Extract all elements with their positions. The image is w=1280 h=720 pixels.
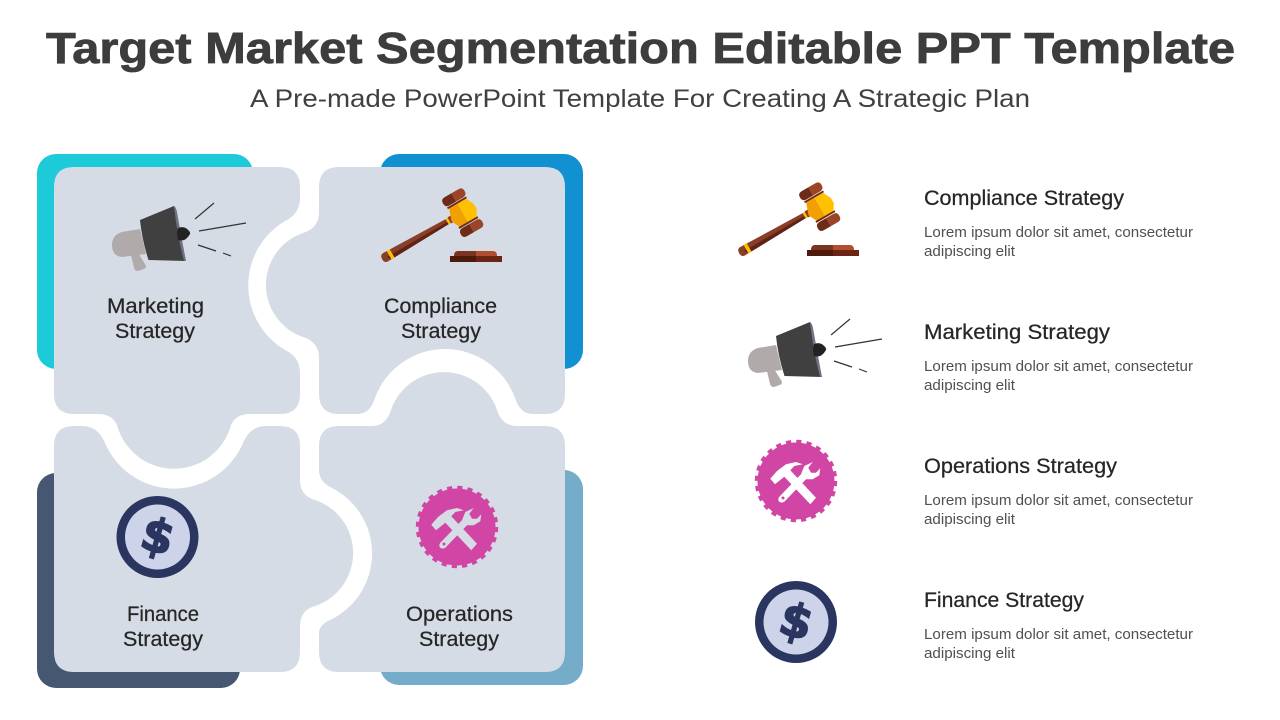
puzzle piece: compliance [266,167,565,414]
heading: compliance strategy: Compliance Strategy [924,187,1125,210]
body text [924,493,1193,528]
label: operations strategy [406,603,513,651]
body text: adipiscing elit [924,512,1015,528]
label: compliance strategy: Compliance [384,295,497,318]
subtitle: A Pre-made PowerPoint Template For Creating A Strategic Plan [250,85,1030,113]
icon: dollar coin [755,581,837,663]
list item: marketing [748,319,1193,394]
label: finance strategy [123,603,203,651]
label: operations strategy: Strategy [419,628,499,651]
list item: finance [755,581,1193,663]
icon: gear with tools [418,488,496,566]
panel: puzzle diagram [37,154,583,688]
body text [924,627,1193,662]
icon: megaphone [112,203,246,271]
body text: adipiscing elit [924,646,1015,662]
heading: operations strategy: Operations Strategy [924,455,1118,478]
body text: Lorem ipsum dolor sit amet, consectetur [924,225,1193,241]
backing tile: light blue [380,470,583,685]
body text: adipiscing elit [924,244,1015,260]
icon: gear with tools [756,442,836,520]
backing tile: teal [37,154,253,369]
label: marketing strategy [107,295,204,343]
body text: Lorem ipsum dolor sit amet, consectetur [924,627,1193,643]
body text [924,225,1193,260]
label: marketing strategy: Strategy [115,320,195,343]
list item: operations [756,442,1193,528]
heading: finance strategy: Finance Strategy [924,589,1084,612]
backing tile: navy [37,473,240,688]
icon: dollar coin [116,496,198,578]
body text: Lorem ipsum dolor sit amet, consectetur [924,493,1193,509]
title: Target Market Segmentation Editable PPT Template [46,24,1235,73]
label: compliance strategy [384,295,497,343]
body text: adipiscing elit [924,378,1015,394]
puzzle piece: finance [54,426,353,672]
label: operations strategy: Operations [406,603,513,626]
label: finance strategy: Strategy [123,628,203,651]
icon: gavel [728,180,859,273]
icon: megaphone [748,319,882,387]
label: marketing strategy: Marketing [107,295,204,318]
label: compliance strategy: Strategy [401,320,481,343]
icon: gavel [371,186,502,279]
backing tile: blue [380,154,583,369]
puzzle piece: operations [319,372,565,672]
label: finance strategy: Finance [127,603,199,626]
puzzle piece: marketing [54,167,300,469]
heading: marketing strategy: Marketing Strategy [924,321,1111,344]
body text [924,359,1193,394]
body text: Lorem ipsum dolor sit amet, consectetur [924,359,1193,375]
list item: compliance [728,180,1193,273]
